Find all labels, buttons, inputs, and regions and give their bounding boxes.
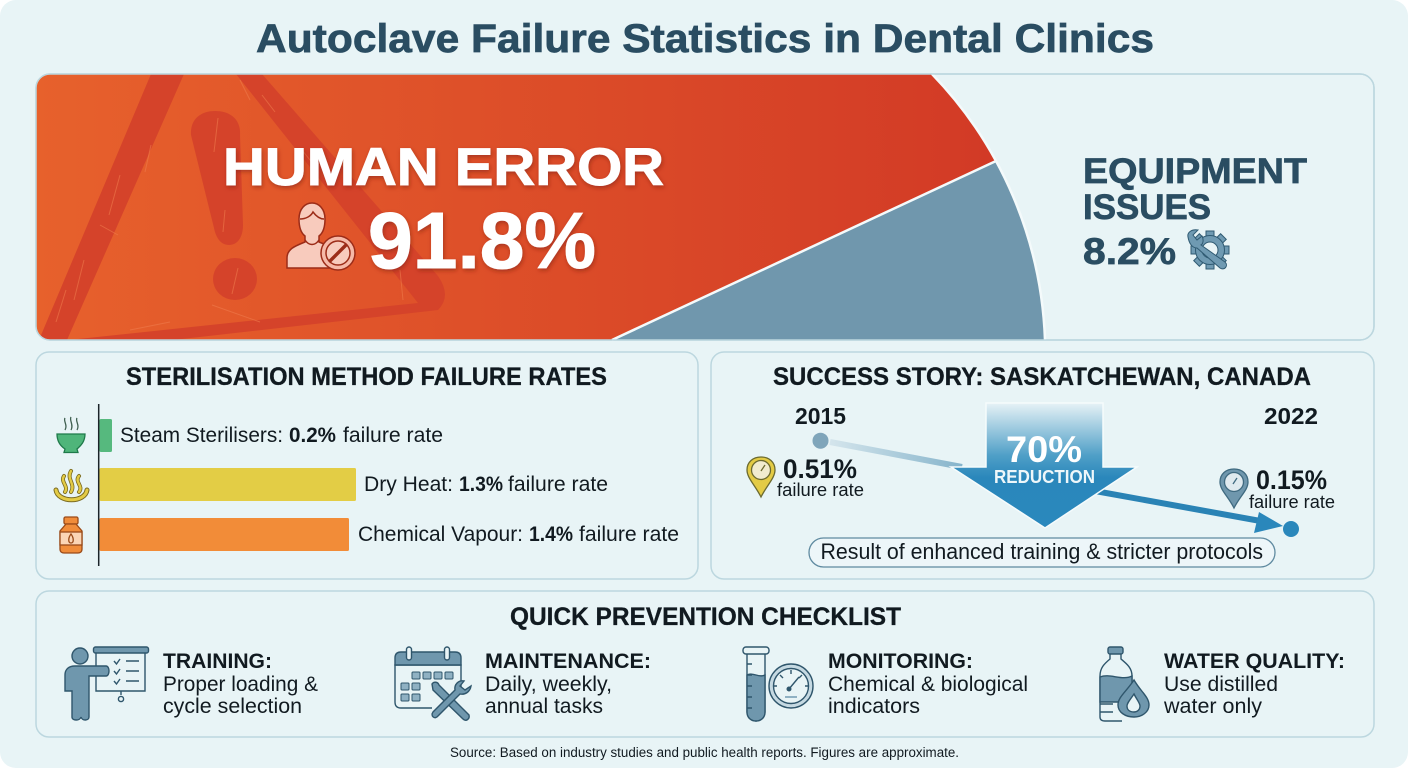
label: chemical vapour: 1.4% [529, 523, 573, 546]
pie segment: equipment issues [612, 161, 1045, 340]
text: maintenance: annual tasks [485, 694, 603, 718]
text: water quality: WATER QUALITY: [1164, 649, 1345, 673]
heading: checklist: QUICK PREVENTION CHECKLIST [510, 603, 901, 631]
stat: equipment percentage: 8.2% [1083, 231, 1176, 272]
label: chemical vapour: failure rate [579, 523, 679, 546]
text: monitoring: indicators [828, 694, 920, 718]
icon: blue gauge pin [1220, 469, 1248, 508]
label: dry heat: 1.3% [459, 473, 503, 496]
heading: success story: SUCCESS STORY: SASKATCHEWAN, CANADA [773, 363, 1311, 391]
label: 2022: 2022 [1264, 403, 1318, 429]
text: training: TRAINING: [163, 649, 272, 673]
panel: failure cause split [36, 74, 1374, 340]
trend line with arrowhead [830, 442, 1283, 533]
source note: Source: Based on industry studies and public health reports. Figures are approximate. [450, 745, 959, 760]
heading: sterilisation rates: STERILISATION METHOD FAILURE RATES [126, 363, 607, 391]
icon: test tube and gauge [743, 647, 813, 721]
text: monitoring: Chemical & biological [828, 672, 1028, 696]
label: dry heat: failure rate [508, 473, 608, 496]
bar: dry heat [100, 468, 356, 501]
icon: training presenter [65, 647, 148, 720]
icon: maintenance calendar and tools [395, 647, 471, 720]
text: water quality: water only [1163, 694, 1262, 718]
icon: yellow gauge pin [747, 457, 775, 497]
icon: person with prohibition sign [287, 203, 355, 270]
title: Autoclave Failure Statistics in Dental Clinics [256, 17, 1154, 61]
label: steam: 0.2% [289, 424, 336, 447]
icon: steam bowl [57, 417, 85, 452]
label: chemical vapour: Chemical Vapour: [358, 523, 523, 546]
icon: chemical bottle [60, 517, 82, 553]
text: maintenance: Daily, weekly, [485, 672, 612, 696]
icon: dry heat [56, 471, 87, 500]
stat: 70%: 70% [1006, 429, 1082, 470]
chart axis [98, 404, 100, 566]
label: dry heat: Dry Heat: [364, 473, 453, 496]
heading: human error: HUMAN ERROR [223, 138, 664, 197]
text: water quality: Use distilled [1164, 672, 1278, 696]
stat: human error percentage: 91.8% [368, 196, 596, 285]
label: 2022 failure rate: failure rate [1249, 492, 1335, 512]
stat: 0.15%: 0.15% [1256, 465, 1327, 495]
bar: steam [100, 419, 112, 452]
pie segment: human error [36, 74, 996, 340]
icon: gear and wrench [1188, 230, 1229, 269]
text: maintenance: MAINTENANCE: [485, 649, 651, 673]
icon: water bottle and drop [1100, 647, 1149, 721]
panel: success story [711, 352, 1374, 579]
panel: quick prevention checklist [36, 591, 1374, 737]
text: training: cycle selection [163, 694, 302, 718]
warning triangle watermark [39, 74, 445, 340]
text: monitoring: MONITORING: [828, 649, 973, 673]
label: 2015 failure rate: failure rate [777, 480, 864, 500]
label: steam: failure rate [343, 424, 443, 447]
callout pill: Result of enhanced training & stricter protocols [820, 539, 1263, 564]
text: training: Proper loading & [163, 672, 318, 696]
label: 2015: 2015 [795, 403, 846, 429]
bar: chemical vapour [100, 518, 349, 551]
stat: 0.51%: 0.51% [783, 454, 857, 484]
label: steam: Steam Sterilisers: [120, 424, 283, 447]
label: reduction: REDUCTION [994, 467, 1095, 487]
heading: equipment issues: ISSUES [1083, 188, 1211, 227]
heading: equipment issues: EQUIPMENT [1083, 152, 1307, 191]
point: 2022 [1283, 521, 1299, 537]
big reduction arrow [951, 403, 1137, 528]
panel: sterilisation method failure rates [36, 352, 698, 579]
point: 2015 [812, 433, 828, 449]
